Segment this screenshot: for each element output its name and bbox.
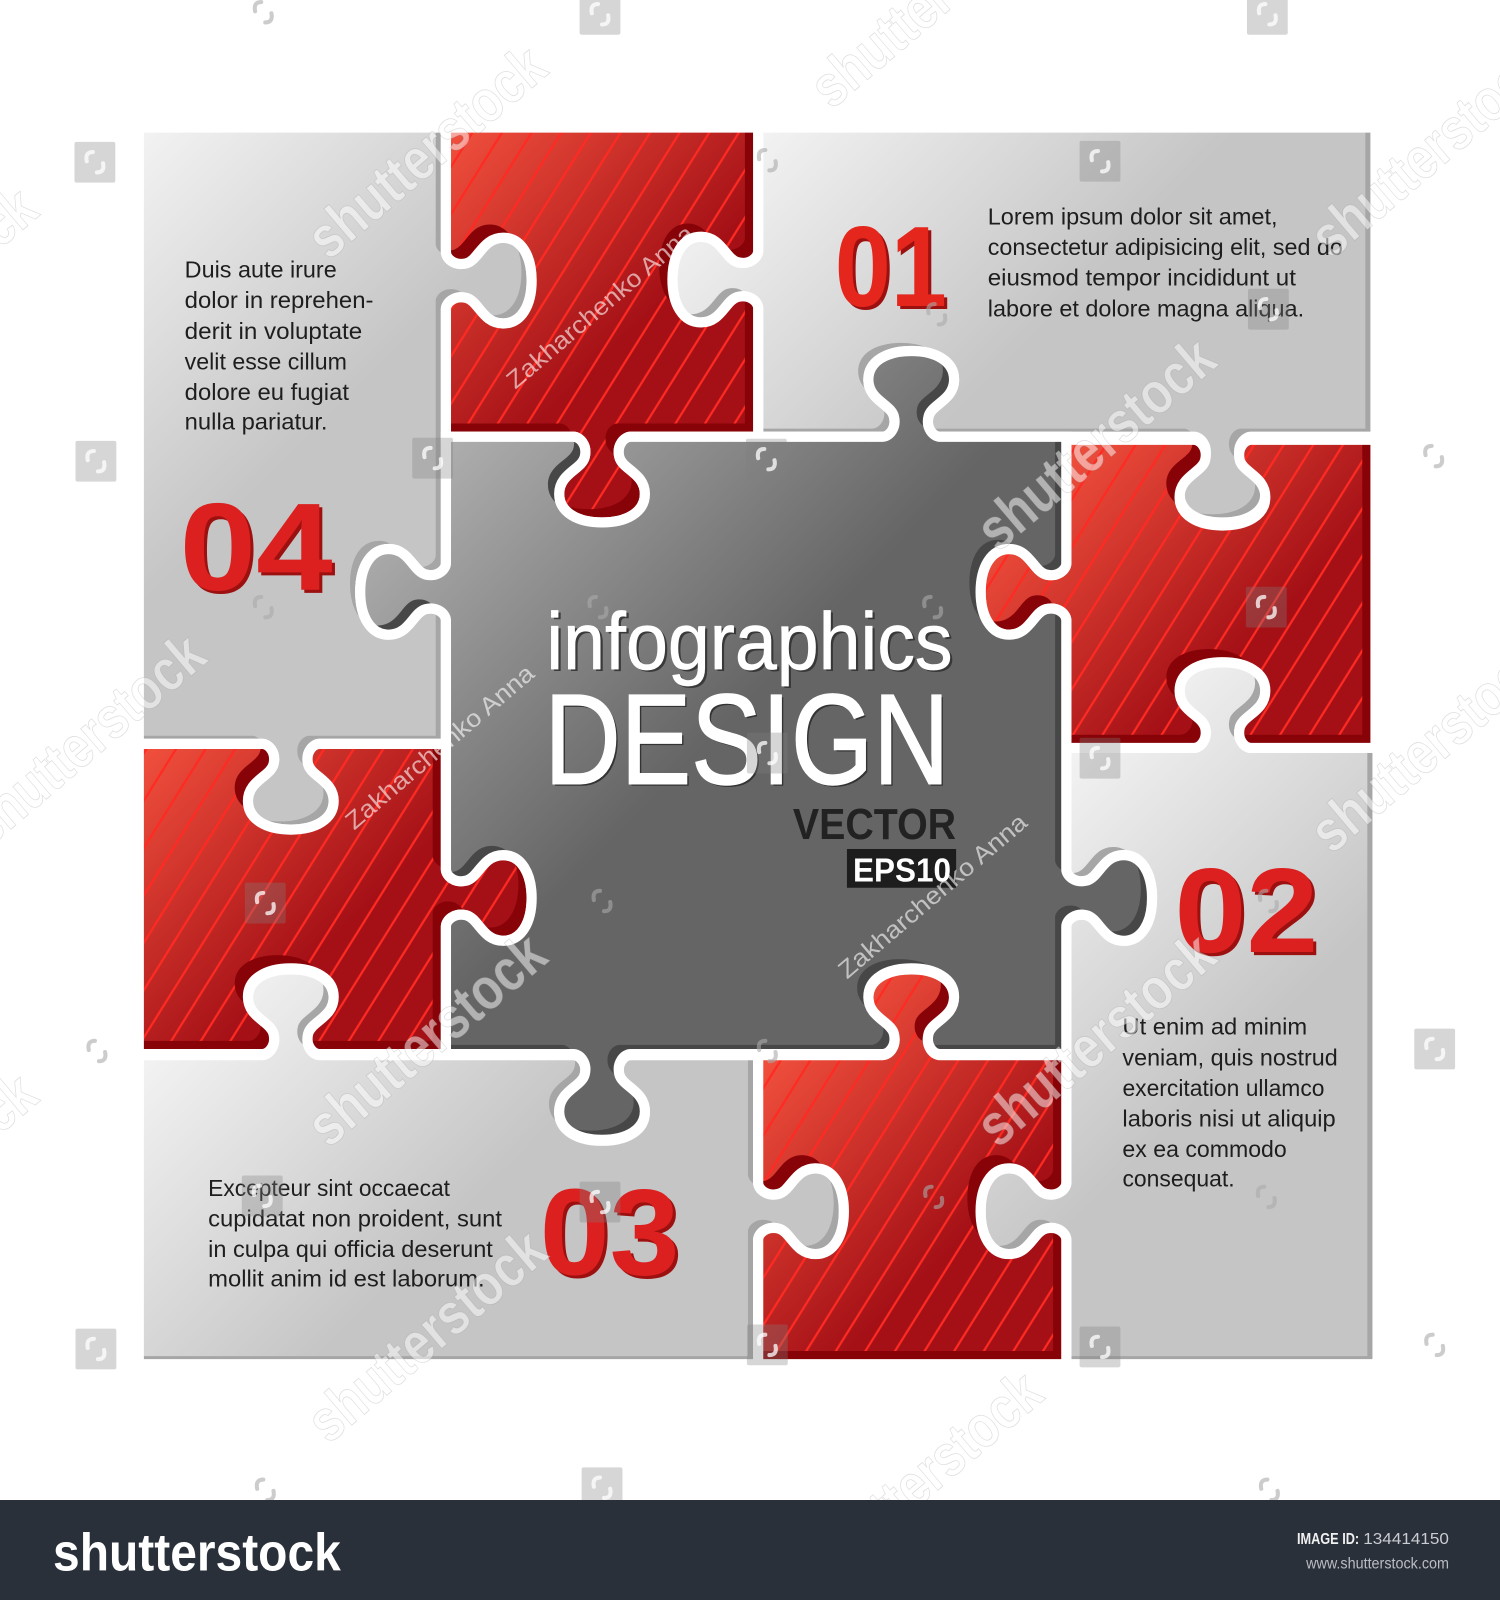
watermark: shutterstock text: shutterstock (294, 1215, 559, 1455)
puzzle piece: 02 grey panel (970, 654, 1378, 1364)
text block 02: consequat. (1122, 1166, 1235, 1192)
puzzle piece: right red (986, 444, 1370, 743)
text block 04 (185, 257, 373, 435)
watermark: author name: Zakharchenko Anna (502, 220, 700, 394)
watermark: shutterstock text: shutterstock (963, 919, 1228, 1159)
badge: EPS10: EPS10 (853, 853, 951, 890)
watermark: shutterstock text: shutterstock (963, 323, 1228, 563)
number 04: 04 (183, 481, 336, 620)
text block 04: derit in voluptate (185, 318, 362, 344)
text block 01 (988, 203, 1343, 321)
footer image id: IMAGE ID: (1297, 1531, 1359, 1548)
text block 01: Lorem ipsum dolor sit amet, (988, 203, 1278, 229)
puzzle piece: 01 grey panel (662, 119, 1376, 522)
text block 04: nulla pariatur. (185, 409, 328, 435)
watermark: author name: Zakharchenko Anna (340, 660, 540, 835)
footer logo text: shutterstock (53, 1523, 341, 1582)
text block 03 (208, 1175, 503, 1292)
text block 01: labore et dolore magna aliqua. (988, 295, 1304, 321)
footer bar (0, 1500, 1500, 1600)
text block 02: laboris nisi ut aliquip (1122, 1106, 1336, 1132)
number 01: 01 (838, 207, 950, 334)
title: infographics DESIGN (544, 597, 955, 814)
puzzle piece: left red (126, 731, 532, 1054)
text block 04: dolor in reprehen- (185, 287, 373, 313)
number 01: 01 (835, 204, 947, 331)
watermark: author name (340, 220, 1033, 984)
footer image id (1297, 1531, 1449, 1548)
text block 02 (1122, 1014, 1338, 1192)
number 03: 03 (540, 1163, 680, 1300)
number 03: 03 (543, 1167, 683, 1304)
number 02: 02 (1178, 846, 1321, 981)
puzzle piece: bottom red (745, 956, 1066, 1364)
title: infographics DESIGN: DESIGN (546, 671, 952, 814)
text block 02: veniam, quis nostrud (1122, 1044, 1338, 1070)
puzzle piece: top red (433, 114, 758, 522)
footer image id: 134414150 (1363, 1531, 1449, 1548)
text block 02: ex ea commodo (1122, 1136, 1287, 1162)
text block 04: dolore eu fugiat (185, 379, 350, 405)
number 04: 04 (180, 478, 333, 617)
text block 02: exercitation ullamco (1122, 1075, 1324, 1101)
text block 03: cupidatat non proident, sunt (208, 1206, 503, 1232)
puzzle piece: 04 grey panel (129, 119, 532, 830)
text block 01: eiusmod tempor incididunt ut (988, 265, 1297, 291)
text block 03: Excepteur sint occaecat (208, 1175, 451, 1201)
text block 04: Duis aute irure (185, 257, 337, 283)
number 02: 02 (1174, 843, 1318, 978)
puzzle piece: centre dark grey (349, 342, 1152, 1140)
label: VECTOR: VECTOR (793, 800, 956, 849)
puzzle piece: 03 grey panel (129, 961, 844, 1364)
text block 01: consectetur adipisicing elit, sed do (988, 234, 1343, 260)
title: infographics DESIGN: infographics (549, 599, 955, 689)
text block 03: in culpa qui officia deserunt (208, 1236, 493, 1262)
text block 02: Ut enim ad minim (1122, 1014, 1307, 1040)
footer url: www.shutterstock.com (1305, 1555, 1449, 1572)
text block 03: mollit anim id est laborum. (208, 1266, 485, 1292)
title: infographics DESIGN: DESIGN (544, 669, 949, 812)
watermark: shutterstock text: shutterstock (294, 919, 559, 1159)
watermark: shutterstock text: shutterstock (789, 1357, 1054, 1597)
title: infographics DESIGN: infographics (546, 597, 953, 687)
watermark: author name: Zakharchenko Anna (833, 809, 1033, 984)
text block 04: velit esse cillum (185, 348, 347, 374)
